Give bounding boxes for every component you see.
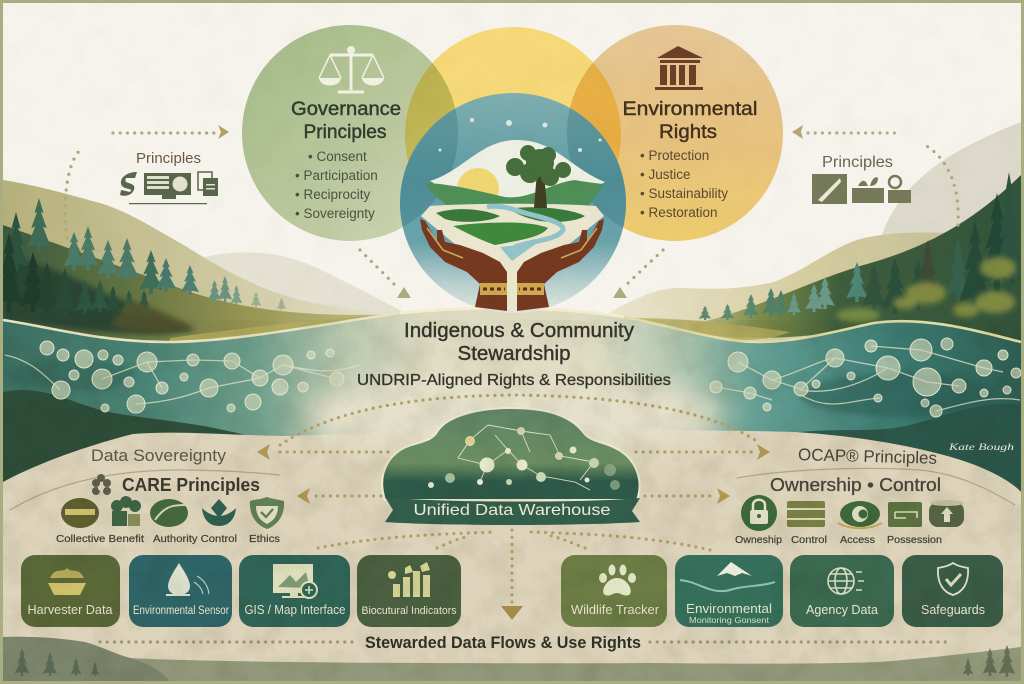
icon: eye access [838,501,882,528]
icon: map monitor [273,564,317,598]
card: safeguards: Safeguards [921,602,985,617]
card: environmental monitoring consent: Environmental [686,601,772,616]
right foliage highlights [836,257,1016,322]
OCAP icon labels: Possession [887,534,942,546]
card: environmental sensor: Environmental Sensor [133,605,229,617]
card: harvester data [21,555,120,627]
mottled dark water edges left [3,390,270,490]
flow: warehouse to OCAP principles [636,444,770,460]
card: wildlife tracker: Wildlife Tracker [571,602,660,617]
right tree line [699,172,1024,320]
list: environmental rights: • Justice [640,167,690,182]
heading: OCAP principles: OCAP® Principles [798,445,937,468]
card: biocultural indicators: Biocutural Indicators [362,605,457,617]
list: environmental rights: • Protection [640,148,709,163]
flow: environmental to stewardship arrow [613,250,663,298]
card: harvester data: Harvester Data [28,602,113,617]
icon: ledger and plant [812,174,911,204]
subtitle: UNDRIP rights: UNDRIP-Aligned Rights & Responsibilities [357,372,671,389]
mid field stripes right [624,318,790,340]
left undergrowth [110,300,195,332]
card: GIS map interface [239,555,350,627]
signature: Kate Bough [948,443,1014,453]
card: environmental monitoring consent: Monitoring Gonsent [689,615,770,625]
card: agency data: Agency Data [806,602,879,617]
left tree line [0,198,286,318]
data node network right [710,338,1021,417]
dark water blobs left [5,359,135,391]
left forest ground [3,225,400,343]
bottom right trees [963,645,1015,677]
flow: warehouse to data sovereignty [257,444,392,460]
icon: ethics shield [250,497,284,529]
dark water blobs right [800,373,1000,417]
icon: scales of justice [319,46,384,92]
icon: CARE lotus [92,474,111,495]
title: indigenous and community stewardship [404,320,634,365]
flow: warehouse to ownership [645,488,730,504]
banner: unified data warehouse [385,497,640,525]
list: governance principles: • Participation [295,168,378,183]
icon: gifts [111,496,141,526]
icon: harvest basket [48,568,86,595]
title: indigenous and community stewardship: Indigenous & Community [404,320,634,342]
heading: environmental rights: Rights [659,122,717,143]
CARE icon labels: Collective Benefit [56,533,144,545]
left principles heading: Principles [136,150,201,167]
scene: river [487,206,563,261]
flow: stewarded dotted line left [100,640,358,644]
panel: governance, yellow and environmental venn circles [242,25,783,243]
card: GIS map interface: GIS / Map Interface [244,602,346,617]
data node network left [5,341,360,413]
icon: safeguard shield [938,563,968,595]
card: safeguards [902,555,1003,627]
heading: ownership control: Ownership • Control [770,475,941,495]
panel: stewardship circle [400,93,626,313]
far hills left [190,252,410,315]
right forest ground [690,175,1021,342]
cloud shape [382,408,639,500]
scene: cream valley and arms [421,204,604,312]
icon: lock [741,495,777,531]
icon: server control [787,501,825,527]
icon: paw print [599,564,636,596]
icon: possession case [888,502,922,527]
flow: warehouse down to data cards [318,530,710,620]
CARE icon labels: Authority Control [153,533,237,545]
card: biocultural indicators [357,555,461,627]
CARE icon row [61,496,284,529]
left forest dark mass [3,255,195,334]
list: governance principles [295,149,378,221]
left principles block [120,150,218,204]
bank line right [624,317,1021,342]
lower mottling texture [0,320,1024,684]
icon: water drop sensor [166,563,209,596]
card: environmental monitoring consent [675,555,783,627]
icon: bar indicators [388,562,430,597]
card: agency data [790,555,894,627]
OCAP icon row [741,495,964,531]
icon: leaf [150,499,188,527]
OCAP icon labels: Control [791,534,827,546]
caption: stewarded data flows: Stewarded Data Flows & Use Rights [365,634,641,652]
scene: tree [506,145,571,208]
scene: lower field [453,222,548,245]
list: environmental rights: • Restoration [640,205,718,220]
list: governance principles: • Consent [308,149,367,164]
panel arc line right [737,468,1015,505]
pale center wash [302,370,722,460]
OCAP icon labels: Access [840,534,875,546]
CARE icon labels [56,533,280,545]
heading: data sovereignty: Data Sovereignty [91,446,227,465]
scene: left field [436,209,500,222]
list: governance principles: • Reciprocity [295,187,370,202]
icon: collective benefit basket [61,498,99,528]
scene: right field [509,207,585,222]
bottom landscape strip [3,637,1021,681]
flow: upper-left dotted arrow [65,125,229,238]
scene: green hills [425,180,603,208]
right hillside [610,232,1021,345]
banner label: Unified Data Warehouse [414,502,611,519]
far hills right [880,122,1021,300]
beige lower panel [3,430,1021,664]
title: indigenous and community stewardship: Stewardship [458,343,570,365]
heading: governance principles: Governance [291,99,401,120]
heading: CARE principles: CARE Principles [122,475,260,495]
panel arc line left [10,470,280,510]
flow: arc linking warehouse to sovereignty and OCAP [280,395,755,445]
bottom left hill shade [3,637,170,681]
bank line center [400,308,624,317]
card: environmental sensor [129,555,232,627]
card: wildlife tracker [561,555,667,627]
heading: governance principles: Principles [304,122,386,143]
scene: sun [457,168,499,210]
icon: institution columns [655,46,703,90]
CARE icon labels: Ethics [249,533,280,545]
mid field stripes left [170,313,407,344]
icon: globe [828,568,864,594]
mottled dark water edges right [770,404,1021,495]
heading: environmental rights [622,99,758,143]
list: governance principles: • Sovereignty [295,206,375,221]
bottom left trees [15,648,99,676]
scene: right hand [517,219,604,311]
left hillside [3,180,420,345]
list: environmental rights: • Sustainability [640,186,728,201]
unified data warehouse cloud [382,408,640,525]
icon: monitor with check [120,172,218,204]
flow: warehouse to CARE [297,488,382,504]
scene: pale sky eye [430,140,605,205]
icon: container [929,500,964,527]
list: environmental rights [640,148,728,220]
icon: mountain and river [680,562,775,591]
flow: governance to stewardship arrow [360,250,411,298]
heading: governance principles [291,99,401,143]
heading: environmental rights: Environmental [622,99,758,120]
flow: upper-right dotted arrow [792,125,958,225]
scene: left hand [420,219,507,311]
right principles block [812,154,911,204]
OCAP icon labels: Owneship [735,534,782,546]
river band [3,308,1021,500]
network in cloud [428,425,620,490]
icon: hands with sprout [202,499,236,526]
flow: stewarded dotted line right [650,640,950,644]
right principles heading: Principles [822,154,893,171]
bank line left [3,313,400,342]
OCAP icon labels [735,534,942,546]
